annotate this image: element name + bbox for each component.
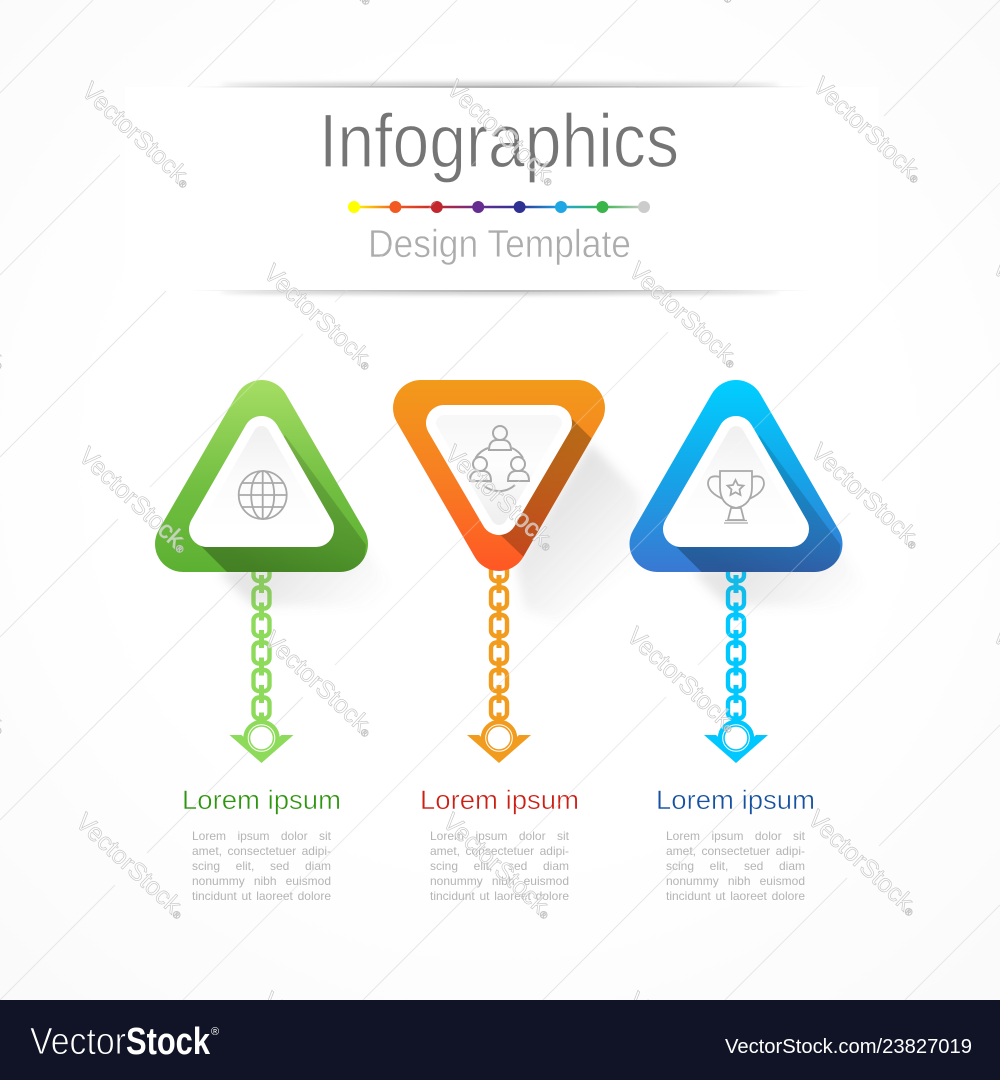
watermark overlay: VectorStock® (70, 808, 192, 925)
watermark overlay: VectorStock® (621, 622, 743, 739)
text block: green column: nonummy nibh euismod (192, 874, 331, 888)
watermark overlay: VectorStock® (437, 808, 559, 925)
footer image id: VectorStock.com/23827019 (725, 1036, 972, 1058)
watermark overlay: VectorStock® (73, 442, 195, 559)
orange chain and arrow (467, 560, 531, 763)
watermark overlay: VectorStock® (258, 259, 380, 376)
text block: orange column: amet, consectetuer adipi- (430, 844, 569, 858)
panel: green triangle (155, 380, 392, 606)
icon: trophy (708, 471, 764, 523)
heading: blue column: Lorem ipsum (656, 785, 815, 815)
text block: green column: Lorem ipsum dolor sit (192, 829, 331, 843)
text block: blue column: Lorem ipsum dolor sit (666, 829, 805, 843)
title: Infographics (319, 99, 679, 184)
watermark overlay: VectorStock® (623, 257, 745, 374)
heading: orange column: Lorem ipsum (420, 785, 579, 815)
watermark overlay: VectorStock® (439, 440, 561, 557)
watermark overlay: VectorStock® (802, 805, 924, 922)
heading: green column: Lorem ipsum (182, 785, 341, 815)
text block: green column: tincidunt ut laoreet dolore (192, 889, 331, 903)
text block: green column (192, 829, 331, 903)
text block: blue column: amet, consectetuer adipi- (666, 844, 805, 858)
footer logo: ® (211, 1026, 219, 1038)
text block: green column: scing elit, sed diam (192, 859, 331, 873)
watermark overlay: VectorStock® (441, 75, 563, 192)
text block: blue column (666, 829, 805, 903)
watermark overlay: VectorStock® (76, 77, 198, 194)
colored dot timeline (348, 201, 650, 213)
footer bar (0, 1000, 1000, 1080)
text block: orange column (430, 829, 569, 903)
blue chain and arrow (704, 560, 768, 763)
watermark overlay: VectorStock® (805, 438, 927, 555)
panel: blue triangle (629, 380, 866, 606)
text block: orange column: tincidunt ut laoreet dolore (430, 889, 569, 903)
footer logo (30, 1021, 219, 1063)
text block: blue column: tincidunt ut laoreet dolore (666, 889, 805, 903)
text block: orange column: scing elit, sed diam (430, 859, 569, 873)
panel: header (125, 82, 878, 295)
text block: green column: amet, consectetuer adipi- (192, 844, 331, 858)
text block: orange column: nonummy nibh euismod (430, 874, 569, 888)
icon: globe (239, 471, 287, 519)
watermark overlay: VectorStock® (807, 72, 929, 189)
footer logo: Stock (126, 1021, 211, 1063)
text block: blue column: nonummy nibh euismod (666, 874, 805, 888)
text block: blue column: scing elit, sed diam (666, 859, 805, 873)
green chain and arrow (230, 560, 294, 763)
footer logo: Vector (30, 1021, 126, 1063)
subtitle: Design Template (368, 223, 631, 266)
icon: people in a circle (470, 426, 529, 491)
text block: orange column: Lorem ipsum dolor sit (430, 829, 569, 843)
panel: orange triangle (393, 380, 637, 610)
watermark overlay: VectorStock® (258, 626, 380, 743)
